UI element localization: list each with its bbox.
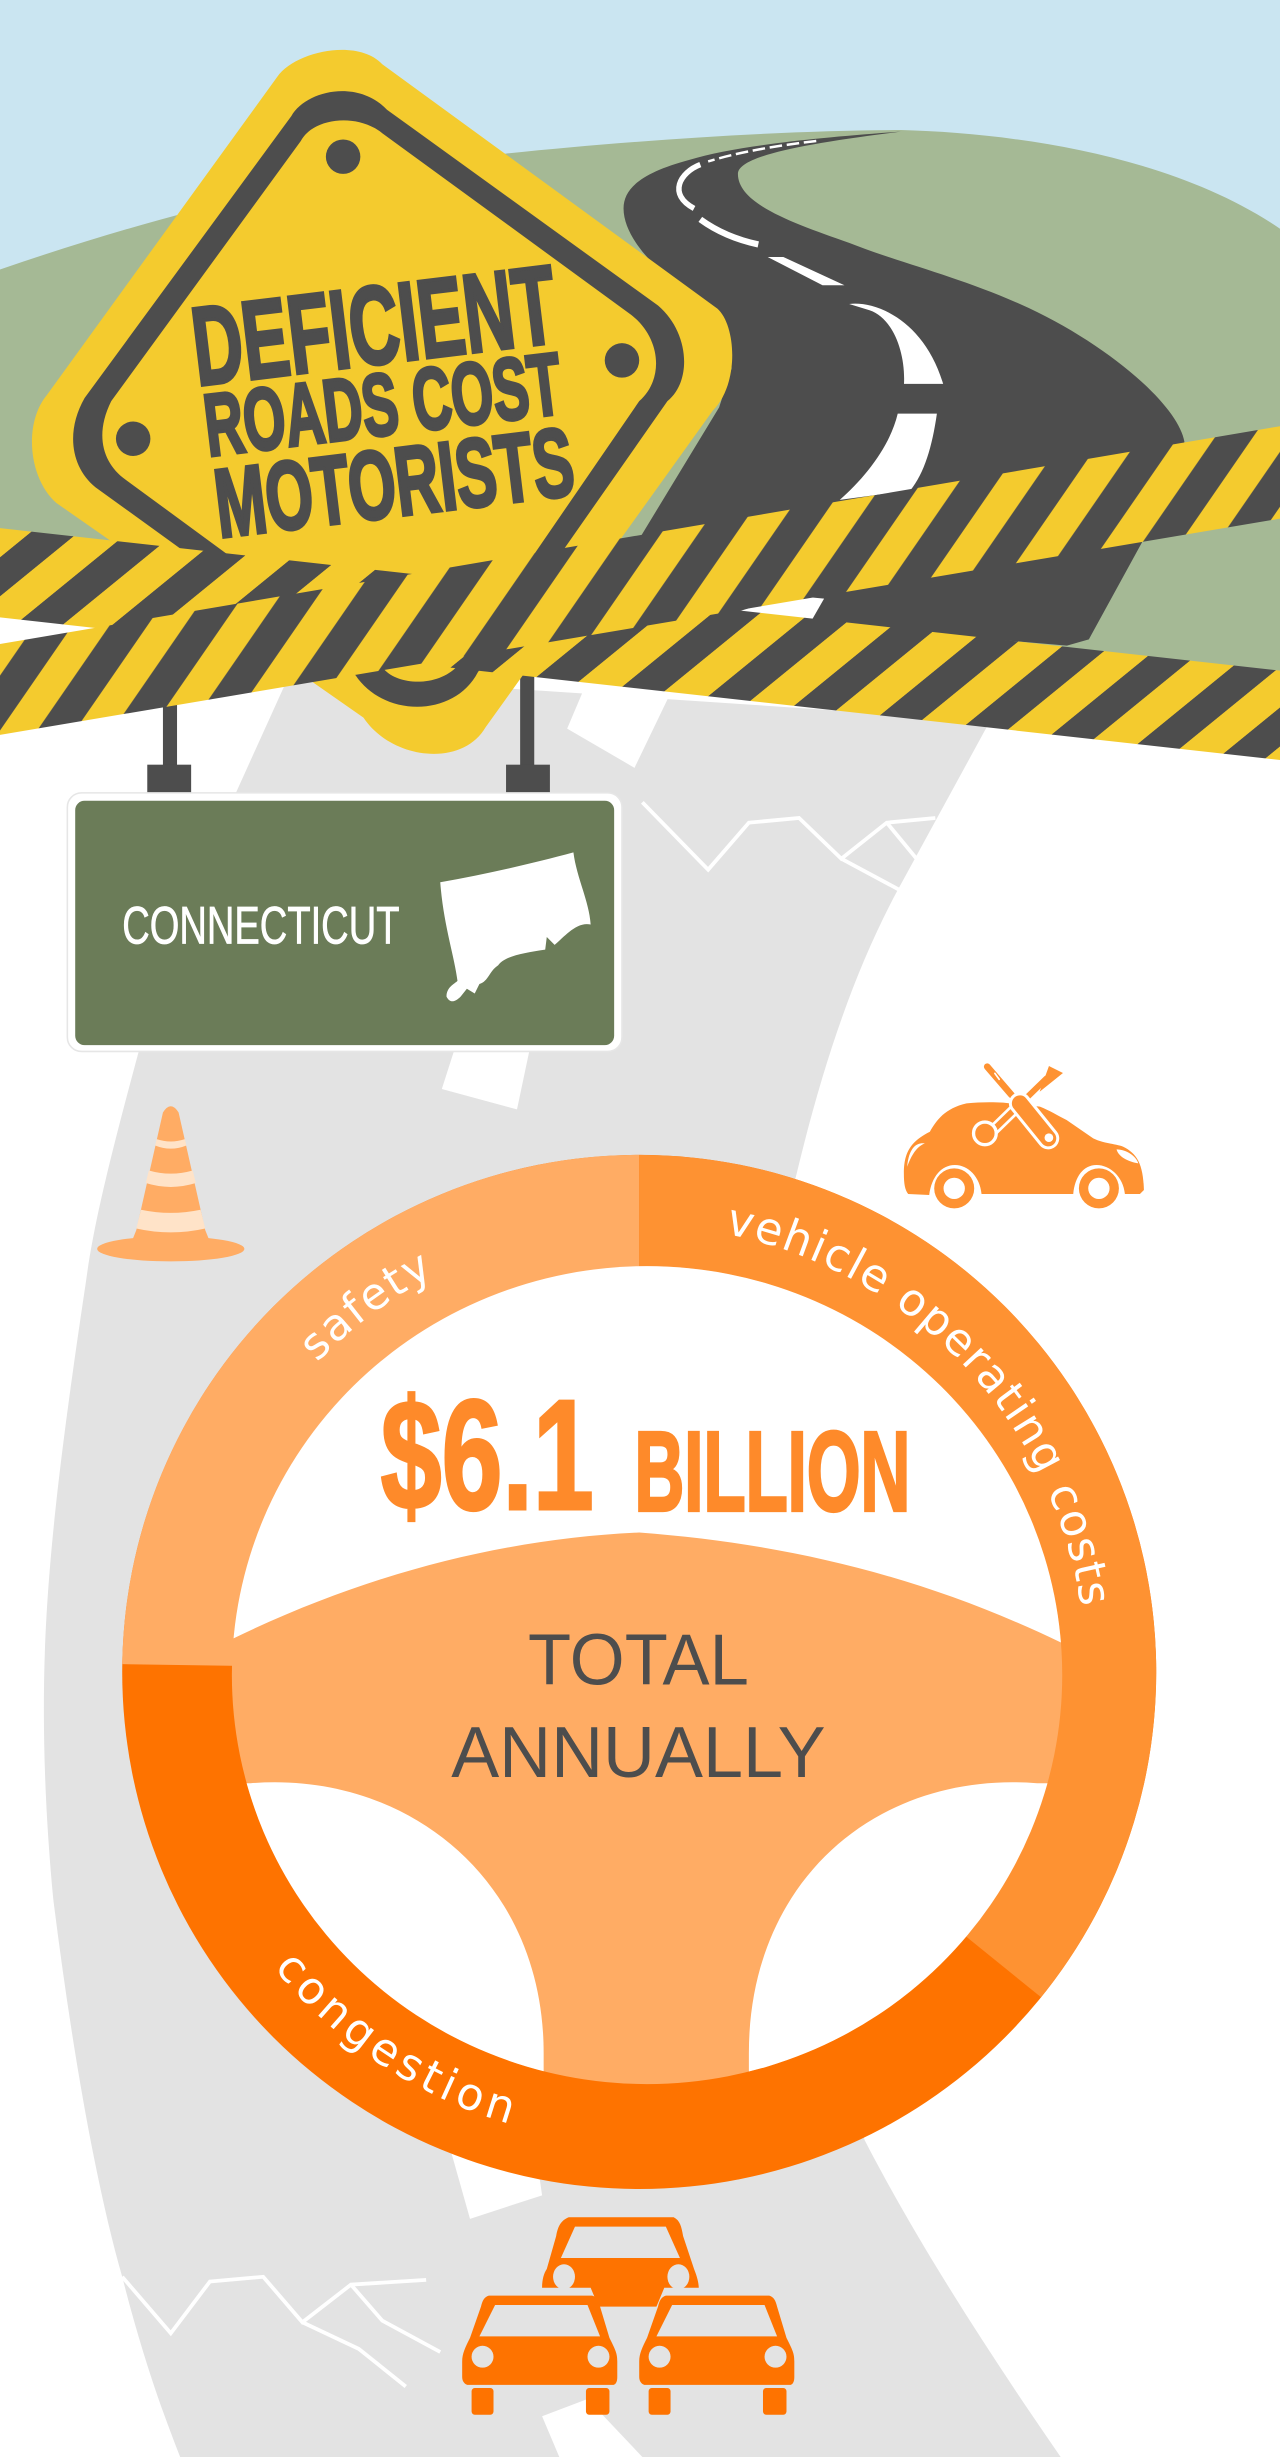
diamond warning sign — [32, 50, 732, 754]
sign title: MOTORISTS — [209, 407, 580, 558]
caution tape upper — [0, 426, 1280, 735]
state name: CONNECTICUT — [122, 896, 400, 955]
road dash 2 — [442, 1050, 530, 1109]
sign title — [185, 241, 580, 558]
icon: wrench and screwdriver — [974, 1067, 1060, 1145]
steering wheel — [122, 1154, 1156, 2189]
total amount: BILLION — [635, 1409, 910, 1535]
icon: traffic cone — [97, 1106, 244, 1261]
road centre line — [708, 141, 816, 161]
total annually label: ANNUALLY — [451, 1713, 826, 1793]
segment: vehicle operating costs — [639, 1155, 1156, 1997]
hills — [0, 130, 1280, 677]
curved label: vehicle operating costs: vehicle operating costs — [732, 1210, 1106, 1604]
hanging poles — [147, 666, 550, 793]
segment: safety — [122, 1155, 639, 1672]
back car — [542, 2217, 699, 2307]
road dash 4 — [542, 2399, 642, 2457]
road: lower grey — [44, 674, 1061, 2457]
road dash 3 — [450, 2147, 542, 2219]
white ground — [0, 619, 1280, 2457]
caution tape lower — [0, 528, 1280, 760]
icon: Connecticut outline — [440, 852, 591, 1001]
road crack bottom — [122, 2277, 440, 2386]
sign bolts — [116, 139, 639, 456]
total amount — [381, 1368, 910, 1543]
front left car — [462, 2296, 617, 2415]
total annually label — [451, 1620, 826, 1793]
wheel interior — [232, 1266, 1062, 2084]
icon: car with crossed tools — [904, 1067, 1144, 1208]
total annually label: TOTAL — [528, 1620, 749, 1700]
total amount: $6.1 — [381, 1368, 594, 1543]
winding dark road — [595, 132, 1184, 646]
sign title: DEFICIENT — [185, 241, 563, 409]
curved label: safety: safety — [304, 1254, 425, 1360]
road dash 1 — [567, 677, 675, 768]
curved label: congestion: congestion — [280, 1958, 512, 2123]
sign title: ROADS COST — [199, 334, 567, 475]
icon: traffic cars — [462, 2217, 794, 2415]
sky — [0, 0, 1280, 470]
front right car — [639, 2296, 794, 2415]
road crack top — [642, 802, 935, 893]
state sign — [67, 793, 622, 1051]
